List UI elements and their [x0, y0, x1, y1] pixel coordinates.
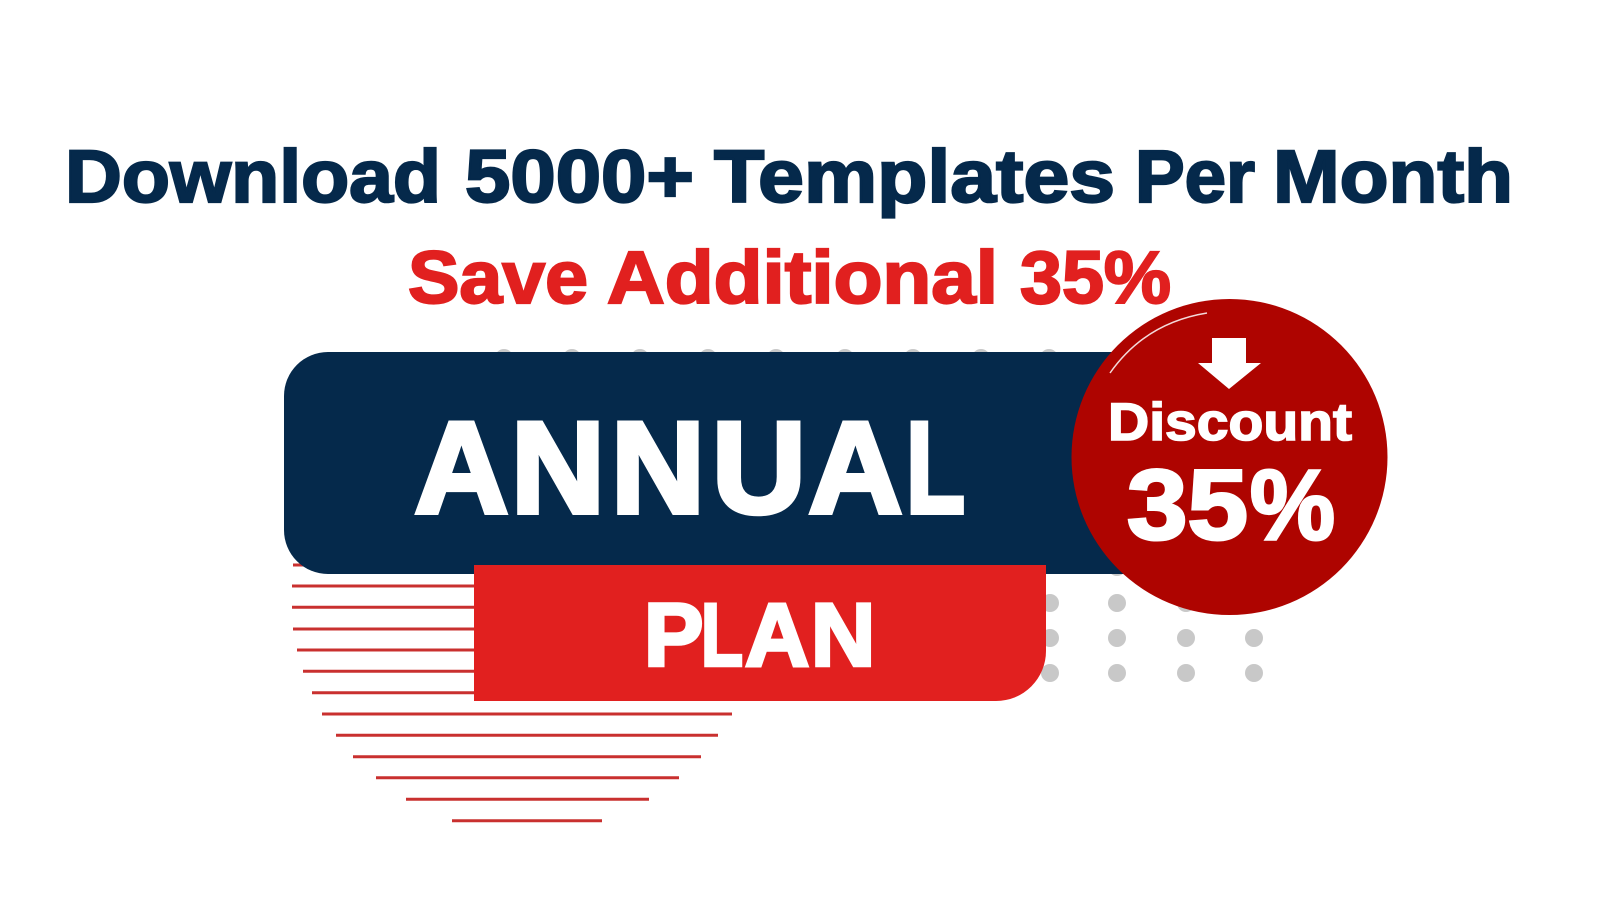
banner text: annual: L: [906, 394, 965, 540]
badge value: 35%: %: [1250, 449, 1335, 560]
heading: download templates: Month: [1273, 135, 1513, 218]
subheading: save additional: Save: [408, 236, 588, 319]
badge highlight arc: [1110, 313, 1207, 373]
heading: download templates: Download: [65, 135, 441, 218]
banner text: plan: AN: [745, 584, 875, 684]
banner text: plan: L: [701, 584, 743, 684]
banner text: plan: P: [644, 584, 703, 684]
navy annual banner: [284, 352, 1184, 574]
striped half circle decoration: [292, 565, 732, 821]
heading: download templates: Templates: [714, 135, 1115, 218]
subheading: save additional: 35%: [1020, 236, 1171, 319]
icon: down arrow: [1198, 338, 1261, 389]
heading: download templates: Per: [1135, 135, 1255, 218]
banner text: annual: ANNUA: [414, 394, 902, 540]
badge value: 35%: 35: [1127, 449, 1248, 560]
dot grid pattern: [495, 349, 1263, 682]
subheading: save additional: Additional: [607, 236, 998, 319]
heading: download templates: 5000+: [465, 135, 694, 218]
badge label: discount: Discount: [1108, 393, 1352, 452]
discount badge: [1072, 299, 1388, 615]
red plan banner: [474, 565, 1046, 701]
